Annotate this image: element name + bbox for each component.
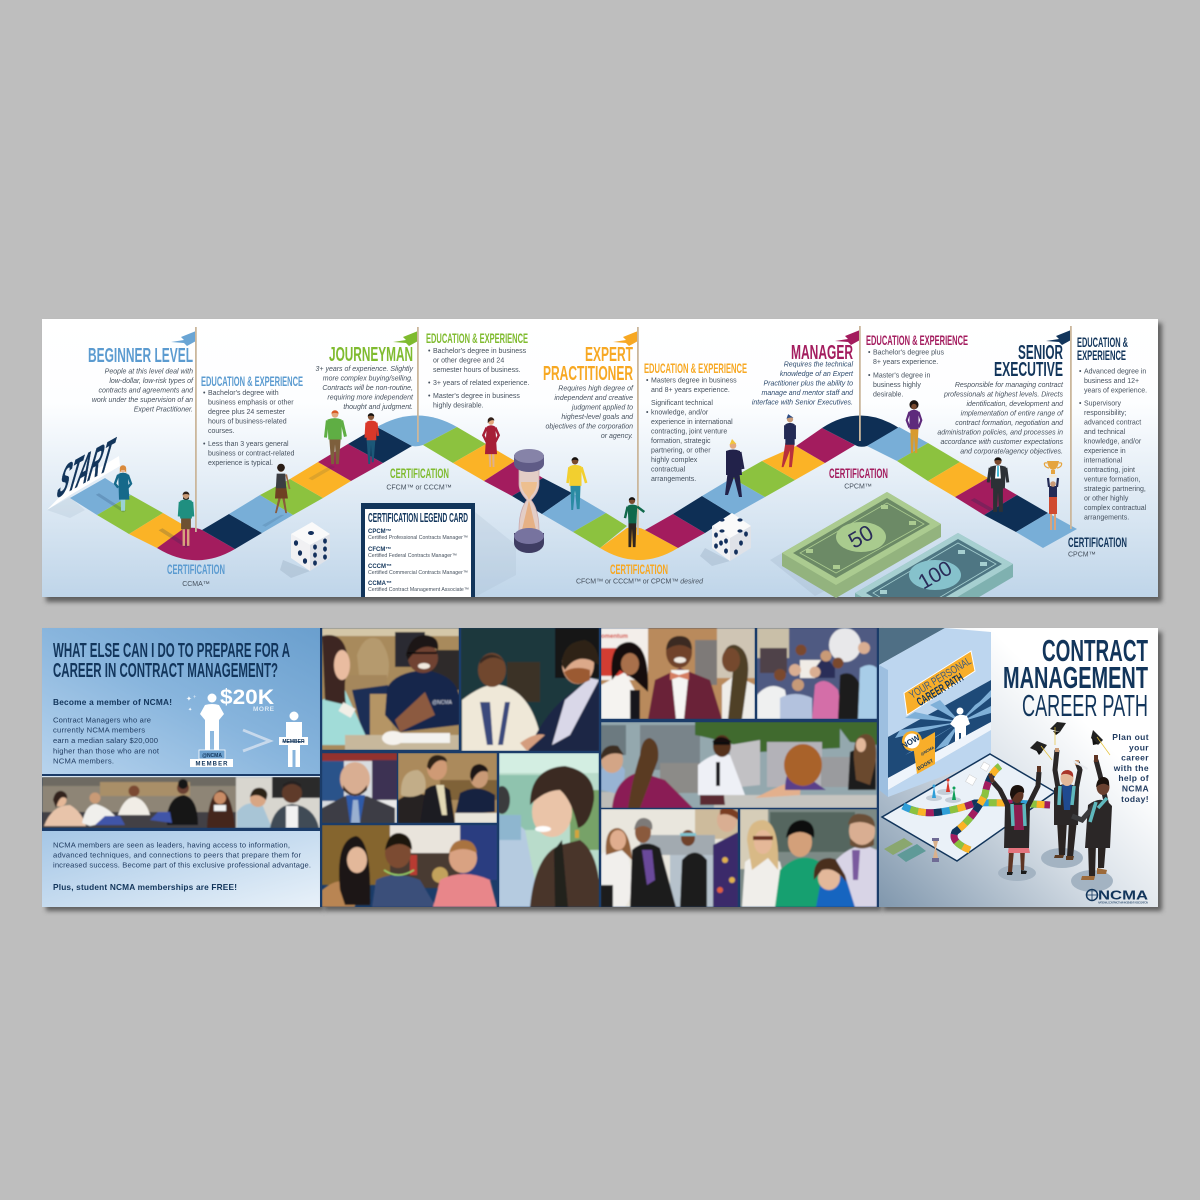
- manager education and experience: desirable.: [873, 392, 903, 398]
- photo: three people smiling: [322, 825, 497, 907]
- box yellow label: YOUR PERSONAL: [907, 655, 974, 702]
- manager education and experience: Bachelor's degree plus: [873, 350, 944, 356]
- figure: man in red shirt: [366, 413, 378, 464]
- certification legend card: [361, 503, 475, 597]
- beginner education and experience: hours of business-related: [208, 418, 287, 426]
- journeyman education and experience: or other degree and 24: [433, 358, 504, 364]
- salary comparison icon: @NCMA: [202, 753, 222, 759]
- manager text: manage and mentor staff and: [762, 390, 854, 397]
- figure: woman with vest: [262, 464, 290, 527]
- NCMA logo: NCMA: [1098, 888, 1148, 902]
- call to action text: NCMA: [1122, 784, 1149, 794]
- manager education and experience: •: [868, 350, 871, 356]
- NCMA logo: NATIONAL CONTRACT MANAGEMENT ASSOCIATION: [1098, 902, 1148, 904]
- photo: three people with bow tie: omentum: [601, 634, 628, 640]
- photo: smiling woman in brown jacket: [499, 753, 599, 907]
- flag: beginner level: [171, 327, 197, 532]
- membership text: currently NCMA members: [53, 726, 145, 734]
- icon: 100 money stack: 100: [914, 557, 956, 594]
- box yellow label: [904, 651, 975, 715]
- expert practitioner text: objectives of the corporation: [545, 424, 633, 430]
- salary comparison icon: MEMBER: [282, 739, 305, 745]
- senior executive text: identification, development and: [966, 401, 1064, 408]
- manager certification: CERTIFICATION: [829, 465, 888, 481]
- beginner education and experience: [201, 373, 303, 467]
- figure: woman in purple: [907, 400, 921, 453]
- photo: crowd group: [757, 628, 877, 719]
- certification legend card: CCCM™: [368, 563, 392, 570]
- advantage text: advanced techniques, and connections to peers that prepare them for: [53, 850, 301, 860]
- manager education and experience: business highly: [873, 382, 921, 389]
- membership text: higher than those who are not: [53, 746, 160, 756]
- box badge: BOOST: [916, 758, 935, 772]
- beginner certification: [167, 561, 225, 588]
- senior executive text: SENIOR: [1018, 342, 1063, 364]
- manager education and experience: Master's degree in: [873, 372, 930, 380]
- figure: man in dark suit: [725, 439, 743, 497]
- manager certification: [829, 465, 888, 490]
- start label: [47, 428, 120, 518]
- journeyman text: 3+ years of experience. Slightly: [316, 366, 413, 373]
- certification legend card: Certified Commercial Contracts Manager™: [368, 570, 468, 576]
- legend card and hourglass shadow: [475, 512, 516, 597]
- senior executive text: [937, 342, 1064, 456]
- figure: man in green top: [625, 497, 644, 547]
- figure: woman holding trophy: [1044, 461, 1062, 530]
- certification legend card: Certified Federal Contracts Manager™: [368, 553, 457, 559]
- senior certification: CPCM™: [1068, 552, 1096, 558]
- figure: woman in red dress: [483, 417, 499, 467]
- icon: die 1: [280, 522, 330, 578]
- photo: man in blue shirt and suit: [322, 753, 397, 823]
- journeyman education and experience: •: [428, 348, 431, 355]
- journeyman education and experience: [426, 330, 529, 410]
- flag: manager: [835, 326, 861, 441]
- call to action text: today!: [1121, 794, 1149, 804]
- senior education and experience: arrangements.: [1084, 514, 1129, 522]
- icon: die 2: [700, 513, 751, 566]
- flag: expert practitioner: [613, 327, 639, 535]
- beginner level text: work under the supervision of an: [92, 397, 193, 404]
- senior certification: CERTIFICATION: [1068, 534, 1127, 550]
- expert education and experience: experience in international: [651, 419, 733, 426]
- journeyman text: more complex buying/selling.: [323, 376, 413, 382]
- manager education and experience: EDUCATION & EXPERIENCE: [866, 332, 968, 348]
- journeyman text: JOURNEYMAN: [329, 343, 413, 366]
- beginner education and experience: Bachelor's degree with: [208, 390, 279, 397]
- manager text: [752, 341, 854, 406]
- journeyman education and experience: semester hours of business.: [433, 367, 521, 374]
- photo: group with patterned jacket: [601, 809, 738, 907]
- expert education and experience: and 8+ years experience.: [651, 387, 730, 394]
- journeyman education and experience: EDUCATION & EXPERIENCE: [426, 330, 528, 346]
- senior education and experience: Advanced degree in: [1084, 368, 1146, 376]
- salary comparison icon: MORE: [253, 706, 275, 713]
- journeyman certification: CERTIFICATION: [390, 465, 449, 481]
- beginner certification: CCMA™: [182, 581, 210, 588]
- expert education and experience: contractual: [651, 466, 686, 474]
- icon: hourglass: [514, 449, 544, 553]
- journeyman text: [316, 343, 414, 411]
- expert education and experience: knowledge, and/or: [651, 410, 709, 416]
- beginner education and experience: Less than 3 years general: [208, 441, 289, 448]
- call to action text: [1112, 732, 1149, 804]
- beginner level text: contracts and agreements and: [98, 388, 194, 394]
- manager education and experience: •: [868, 372, 871, 380]
- senior executive text: EXECUTIVE: [994, 359, 1063, 381]
- journeyman certification: [386, 465, 452, 492]
- journeyman education and experience: 3+ years of related experience.: [433, 380, 529, 387]
- expert practitioner text: [543, 343, 634, 440]
- journeyman education and experience: highly desirable.: [433, 402, 484, 410]
- photo strip: [42, 774, 320, 831]
- expert education and experience: formation, strategic: [651, 438, 711, 445]
- senior executive text: and corporate/agency objectives.: [960, 448, 1063, 456]
- senior education and experience: business and 12+: [1084, 378, 1139, 385]
- call to action text: Plan out: [1112, 732, 1149, 742]
- beginner education and experience: courses.: [208, 428, 235, 435]
- senior education and experience: [1077, 334, 1147, 522]
- box yellow label: CAREER PATH: [914, 670, 966, 709]
- senior education and experience: EDUCATION &: [1077, 334, 1128, 350]
- figure: man in teal: [159, 491, 193, 548]
- heading: CAREER IN CONTRACT MANAGEMENT?: [53, 659, 278, 682]
- beginner level text: BEGINNER LEVEL: [88, 344, 193, 367]
- journeyman text: thought and judgment.: [343, 404, 413, 411]
- salary comparison icon: ✦: [186, 695, 192, 703]
- expert education and experience: arrangements.: [651, 476, 696, 483]
- journeyman text: requiring more independent: [327, 394, 414, 402]
- membership text: NCMA members.: [53, 756, 114, 766]
- journeyman education and experience: •: [428, 380, 431, 387]
- box badge: [900, 731, 935, 774]
- senior education and experience: strategic partnering,: [1084, 486, 1146, 493]
- senior education and experience: or other highly: [1084, 496, 1129, 502]
- senior education and experience: years of experience.: [1084, 388, 1147, 394]
- figure: woman in blue at start: [96, 465, 131, 512]
- beginner level text: People at this level deal with: [105, 368, 193, 376]
- title: [1003, 633, 1148, 723]
- beginner education and experience: experience is typical.: [208, 460, 273, 467]
- beginner certification: CERTIFICATION: [167, 561, 225, 577]
- certification legend card: CPCM™: [368, 528, 392, 535]
- journeyman education and experience: Bachelor's degree in business: [433, 348, 527, 355]
- flag: senior executive: [1046, 326, 1072, 529]
- salary comparison icon: $20K: [220, 686, 274, 709]
- call to action text: with the: [1113, 763, 1149, 773]
- expert education and experience: [644, 360, 747, 483]
- figure: graduate man right: [1071, 755, 1113, 892]
- salary comparison icon: MEMBER: [196, 762, 228, 768]
- call to action text: help of: [1118, 773, 1149, 783]
- figure: graduate man center: [1041, 748, 1088, 868]
- senior executive text: contract formation, negotiation and: [955, 420, 1064, 427]
- senior education and experience: Supervisory: [1084, 400, 1121, 408]
- senior executive text: professionals at highest levels. Directs: [943, 392, 1063, 398]
- photo: woman in navy polo at table: [322, 628, 459, 750]
- photo: group with lanyards: [740, 809, 877, 907]
- beginner level text: [88, 344, 194, 414]
- figure: man in green shirt: [308, 410, 345, 480]
- certification legend card: Certified Contract Management Associate™: [368, 587, 469, 593]
- expert practitioner text: or agency.: [601, 433, 633, 440]
- manager text: knowledge of an Expert: [780, 371, 854, 378]
- expert education and experience: •: [646, 410, 649, 416]
- photo: three people with bow tie: [601, 628, 755, 719]
- NCMA logo: [1086, 888, 1148, 904]
- expert education and experience: partnering, or other: [651, 448, 711, 454]
- icon: 50 money stack: [770, 492, 941, 598]
- manager text: Practitioner plus the ability to: [764, 380, 853, 388]
- certification legend card: CFCM™: [368, 546, 391, 553]
- beginner education and experience: business or contract-related: [208, 450, 294, 458]
- call to action text: your: [1129, 742, 1149, 752]
- expert education and experience: highly complex: [651, 457, 698, 464]
- beginner education and experience: degree plus 24 semester: [208, 409, 286, 416]
- small money and hourglass: [884, 838, 939, 862]
- manager education and experience: 8+ years experience.: [873, 359, 938, 366]
- panel: photo collage: [320, 628, 882, 911]
- manager text: Requires the technical: [784, 362, 853, 368]
- panel: career path board: START: [52, 428, 120, 510]
- advantage text: NCMA members are seen as leaders, having access to information,: [53, 840, 290, 850]
- game board path: [70, 416, 1077, 560]
- salary comparison icon: +: [193, 695, 197, 701]
- heading: [53, 639, 290, 682]
- beginner education and experience: EDUCATION & EXPERIENCE: [201, 373, 303, 389]
- icons: graduation caps: [1030, 722, 1110, 760]
- expert certification: CFCM™ or CCCM™ or CPCM™ desired: [576, 578, 704, 586]
- manager text: MANAGER: [791, 341, 853, 364]
- senior education and experience: contracting, joint: [1084, 467, 1135, 474]
- manager text: interface with Senior Executives.: [752, 400, 853, 406]
- flag: journeyman: [393, 327, 419, 442]
- expert practitioner text: highest-level goals and: [561, 414, 634, 421]
- senior education and experience: responsibility;: [1084, 410, 1126, 417]
- panel: career path board: [42, 319, 1162, 638]
- advantage text: [53, 840, 311, 892]
- heading: WHAT ELSE CAN I DO TO PREPARE FOR A: [53, 639, 290, 662]
- membership text: Contract Managers who are: [53, 716, 151, 724]
- icon: 50 money stack: 50: [844, 520, 878, 554]
- journeyman education and experience: Master's degree in business: [433, 393, 520, 400]
- manager education and experience: [866, 332, 968, 398]
- photo: woman in navy polo at table: @NCMA: [432, 700, 453, 706]
- beginner education and experience: •: [203, 441, 206, 448]
- box badge: @NCMA: [920, 746, 935, 757]
- certification legend card: Certified Professional Contracts Manager™: [368, 535, 468, 541]
- figure: graduate woman: [990, 766, 1039, 881]
- senior executive text: administration policies, and processes in: [937, 430, 1063, 436]
- expert practitioner text: independent and creative: [554, 395, 633, 402]
- expert practitioner text: judgment applied to: [571, 404, 633, 412]
- photo: two men talking: [461, 628, 599, 751]
- membership text: Become a member of NCMA!: [53, 697, 172, 707]
- expert education and experience: Masters degree in business: [651, 378, 737, 384]
- call to action text: career: [1121, 752, 1149, 762]
- photo: conversation on patio: [601, 722, 877, 808]
- senior education and experience: •: [1079, 400, 1082, 408]
- beginner education and experience: •: [203, 390, 206, 397]
- photo: group at wood wall: [398, 753, 497, 823]
- membership text: earn a median salary $20,000: [53, 736, 158, 745]
- journeyman certification: CFCM™ or CCCM™: [386, 484, 452, 492]
- expert education and experience: Significant technical: [651, 400, 713, 407]
- game board: [882, 754, 1055, 861]
- panel: prepare for a career: [42, 628, 324, 911]
- expert education and experience: EDUCATION & EXPERIENCE: [644, 360, 747, 376]
- senior education and experience: international: [1084, 458, 1123, 464]
- expert practitioner text: Requires high degree of: [558, 386, 634, 392]
- senior education and experience: complex contractual: [1084, 505, 1147, 512]
- advantage text: increased success. Become part of this exclusive professional advantage.: [53, 860, 311, 870]
- panel: contract management career path cover: [879, 628, 1162, 911]
- expert certification: [576, 561, 704, 586]
- figure: person navy shirt red trousers: [782, 414, 795, 467]
- expert education and experience: •: [646, 378, 649, 384]
- expert practitioner text: PRACTITIONER: [543, 362, 633, 385]
- expert education and experience: contracting, joint venture: [651, 428, 727, 436]
- senior education and experience: knowledge, and/or: [1084, 438, 1142, 446]
- manager certification: CPCM™: [844, 484, 872, 490]
- journeyman education and experience: •: [428, 393, 431, 400]
- membership text: [53, 697, 172, 766]
- certification legend card: CCMA™: [368, 580, 392, 587]
- senior certification: [1068, 534, 1127, 558]
- senior executive text: Responsible for managing contract: [955, 382, 1064, 389]
- senior executive text: implementation of entire range of: [961, 410, 1064, 418]
- senior education and experience: •: [1079, 368, 1082, 376]
- expert practitioner text: EXPERT: [585, 343, 633, 366]
- senior education and experience: EXPERIENCE: [1077, 347, 1126, 363]
- game box: [879, 628, 991, 797]
- salary comparison icon: [186, 686, 308, 768]
- senior executive text: accordance with customer expectations: [940, 439, 1063, 446]
- figure: man in yellow shirt: [568, 457, 586, 510]
- salary comparison icon: ✦: [188, 707, 192, 713]
- beginner education and experience: business emphasis or other: [208, 400, 294, 406]
- certification legend card: CERTIFICATION LEGEND CARD: [368, 510, 468, 525]
- senior education and experience: and technical: [1084, 429, 1126, 436]
- figure: executive man: [971, 457, 1008, 516]
- senior education and experience: advanced contract: [1084, 420, 1141, 426]
- beginner level text: Expert Practitioner.: [134, 406, 193, 414]
- icon: 100 money stack: [855, 533, 1013, 638]
- senior education and experience: experience in: [1084, 448, 1126, 455]
- senior education and experience: venture formation,: [1084, 476, 1140, 484]
- journeyman text: Contracts will be non-routine,: [322, 385, 413, 392]
- advantage text: Plus, student NCMA memberships are FREE!: [53, 882, 237, 892]
- beginner level text: low-dollar, low-risk types of: [109, 378, 194, 385]
- box badge: NOW: [900, 733, 922, 751]
- expert certification: CERTIFICATION: [610, 561, 668, 577]
